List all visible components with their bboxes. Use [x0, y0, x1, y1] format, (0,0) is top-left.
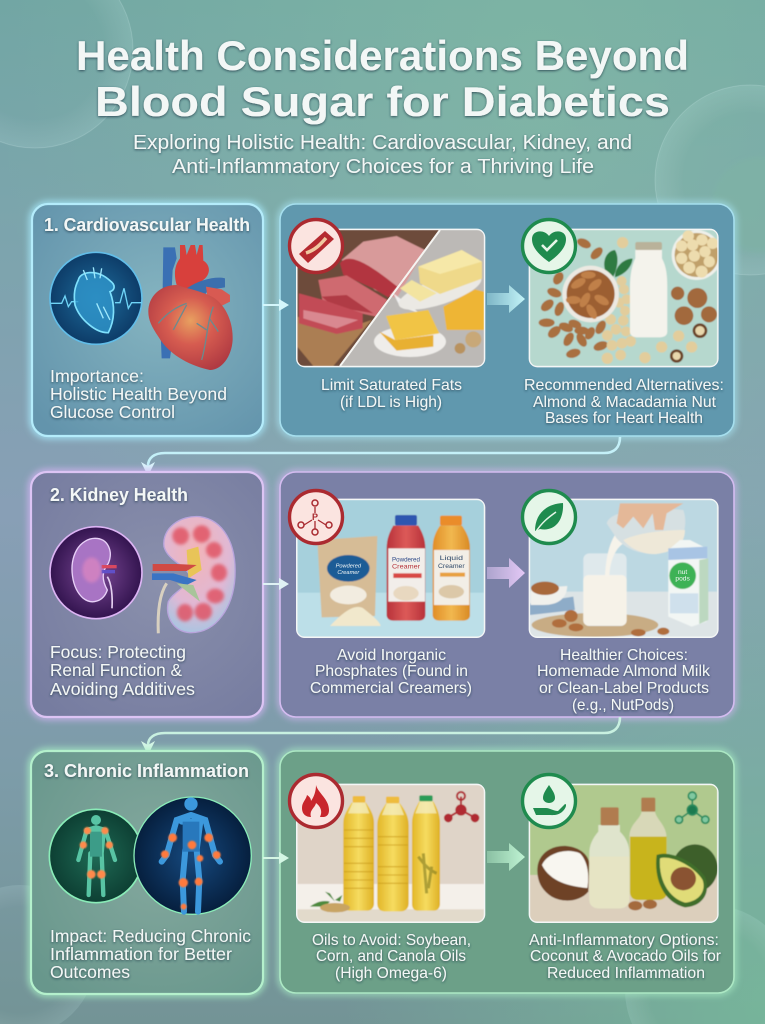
photo: commercial creamers — [297, 500, 484, 637]
panel: cardiovascular overview — [32, 204, 263, 436]
title: Health Considerations Beyond — [76, 32, 689, 79]
arrow: overview to detail row 1 — [263, 299, 289, 311]
heading: inflammation: 3. Chronic Inflammation — [44, 760, 249, 781]
photo: commercial creamers: Creamer — [392, 563, 420, 570]
icon: heart check badge — [522, 220, 576, 272]
text: focus: Renal Function & — [50, 660, 182, 680]
caption: recommended alternatives: Almond & Macadamia Nut — [533, 394, 717, 411]
icon: oil drop in hand badge — [522, 774, 576, 828]
caption: healthier choices: (e.g., NutPods) — [572, 697, 674, 714]
caption: recommended alternatives — [524, 377, 724, 427]
photo: nuts and milk — [530, 230, 722, 366]
photo: commercial creamers: Powdered — [336, 563, 362, 569]
photo: commercial creamers: Powdered — [392, 557, 420, 564]
photo: almond milk — [530, 500, 717, 637]
photo: meat and dairy — [297, 230, 485, 366]
text: impact: Outcomes — [50, 962, 130, 982]
text: importance: Holistic Health Beyond — [50, 384, 227, 404]
heading: cardiovascular: 1. Cardiovascular Health — [44, 214, 250, 235]
arrow: oils to alternatives — [487, 843, 525, 871]
icon: green body circle — [49, 809, 143, 903]
photo: anti-inflammatory oils — [530, 785, 718, 922]
caption: avoid phosphates — [310, 647, 472, 697]
subtitle: Anti-Inflammatory Choices for a Thriving Life — [172, 155, 594, 178]
caption: avoid phosphates: Commercial Creamers) — [310, 680, 472, 697]
text: importance: Glucose Control — [50, 402, 175, 422]
subtitle: Exploring Holistic Health: Cardiovascular, Kidney, and — [133, 131, 632, 154]
text: focus — [50, 642, 195, 699]
caption: anti-inflammatory options: Coconut & Avocado Oils for — [530, 948, 722, 965]
caption: healthier choices — [537, 647, 711, 714]
text: importance — [50, 366, 227, 422]
caption: anti-inflammatory options — [529, 932, 722, 982]
text: impact: Impact: Reducing Chronic — [50, 926, 251, 946]
icon: phosphate molecule badge: P — [312, 512, 318, 522]
title: Blood Sugar for Diabetics — [95, 78, 670, 125]
panel: kidney overview — [31, 472, 263, 717]
panel: inflammation overview — [31, 751, 263, 994]
title — [76, 32, 689, 125]
icon: anatomical kidney — [152, 517, 235, 633]
arrow: phosphates to choices — [487, 558, 525, 588]
caption: healthier choices: Healthier Choices: — [560, 647, 688, 664]
caption: oils to avoid: Oils to Avoid: Soybean, — [312, 932, 471, 949]
photo: commercial creamers: Liquid — [440, 555, 464, 562]
caption: oils to avoid — [312, 932, 471, 982]
photo: commercial creamers: Creamer — [337, 570, 360, 576]
photo: almond milk: nut — [678, 569, 687, 576]
icon: clogged artery badge — [290, 220, 342, 272]
text: focus: Avoiding Additives — [50, 679, 195, 699]
subtitle — [133, 131, 632, 178]
icon: glowing kidney circle — [50, 527, 142, 619]
caption: anti-inflammatory options: Anti-Inflammatory Options: — [529, 932, 719, 949]
caption: limit saturated fats: (if LDL is High) — [340, 394, 442, 411]
arrow: overview to detail row 2 — [263, 578, 289, 590]
caption: anti-inflammatory options: Reduced Inflammation — [547, 965, 705, 982]
caption: recommended alternatives: Recommended Alternatives: — [524, 377, 724, 394]
icon: phosphate molecule badge — [290, 490, 342, 544]
photo: almond milk: pods — [675, 576, 691, 583]
arrow: overview to detail row 3 — [263, 852, 289, 864]
caption: oils to avoid: Corn, and Canola Oils — [316, 948, 466, 965]
caption: limit saturated fats — [321, 377, 462, 411]
caption: avoid phosphates: Phosphates (Found in — [315, 663, 468, 680]
icon: leaf badge — [522, 490, 576, 544]
text: focus: Focus: Protecting — [50, 642, 186, 662]
photo: commercial creamers: Creamer — [438, 563, 465, 570]
text: importance: Importance: — [50, 366, 144, 386]
caption: limit saturated fats: Limit Saturated Fats — [321, 377, 462, 394]
arrow: connector row 2 to row 3 — [141, 717, 620, 755]
heading: kidney: 2. Kidney Health — [50, 484, 188, 505]
caption: recommended alternatives: Bases for Heart Health — [545, 410, 703, 427]
panel: oils — [280, 751, 734, 993]
photo: oils to avoid — [297, 785, 484, 922]
icon: blue body circle — [134, 797, 251, 914]
caption: oils to avoid: (High Omega-6) — [335, 965, 447, 982]
icon: anatomical heart — [148, 245, 233, 370]
icon: flame badge — [290, 774, 342, 828]
caption: healthier choices: or Clean-Label Products — [539, 680, 709, 697]
text: impact: Inflammation for Better — [50, 944, 232, 964]
caption: avoid phosphates: Avoid Inorganic — [337, 647, 446, 664]
panel: phosphates and choices — [280, 472, 734, 717]
icon: glowing heart circle — [50, 252, 142, 344]
panel: saturated fats and alternatives — [280, 204, 734, 436]
caption: healthier choices: Homemade Almond Milk — [537, 663, 711, 680]
arrow: fats to alternatives — [487, 285, 525, 313]
arrow: connector row 1 to row 2 — [141, 437, 620, 476]
text: impact — [50, 926, 251, 982]
